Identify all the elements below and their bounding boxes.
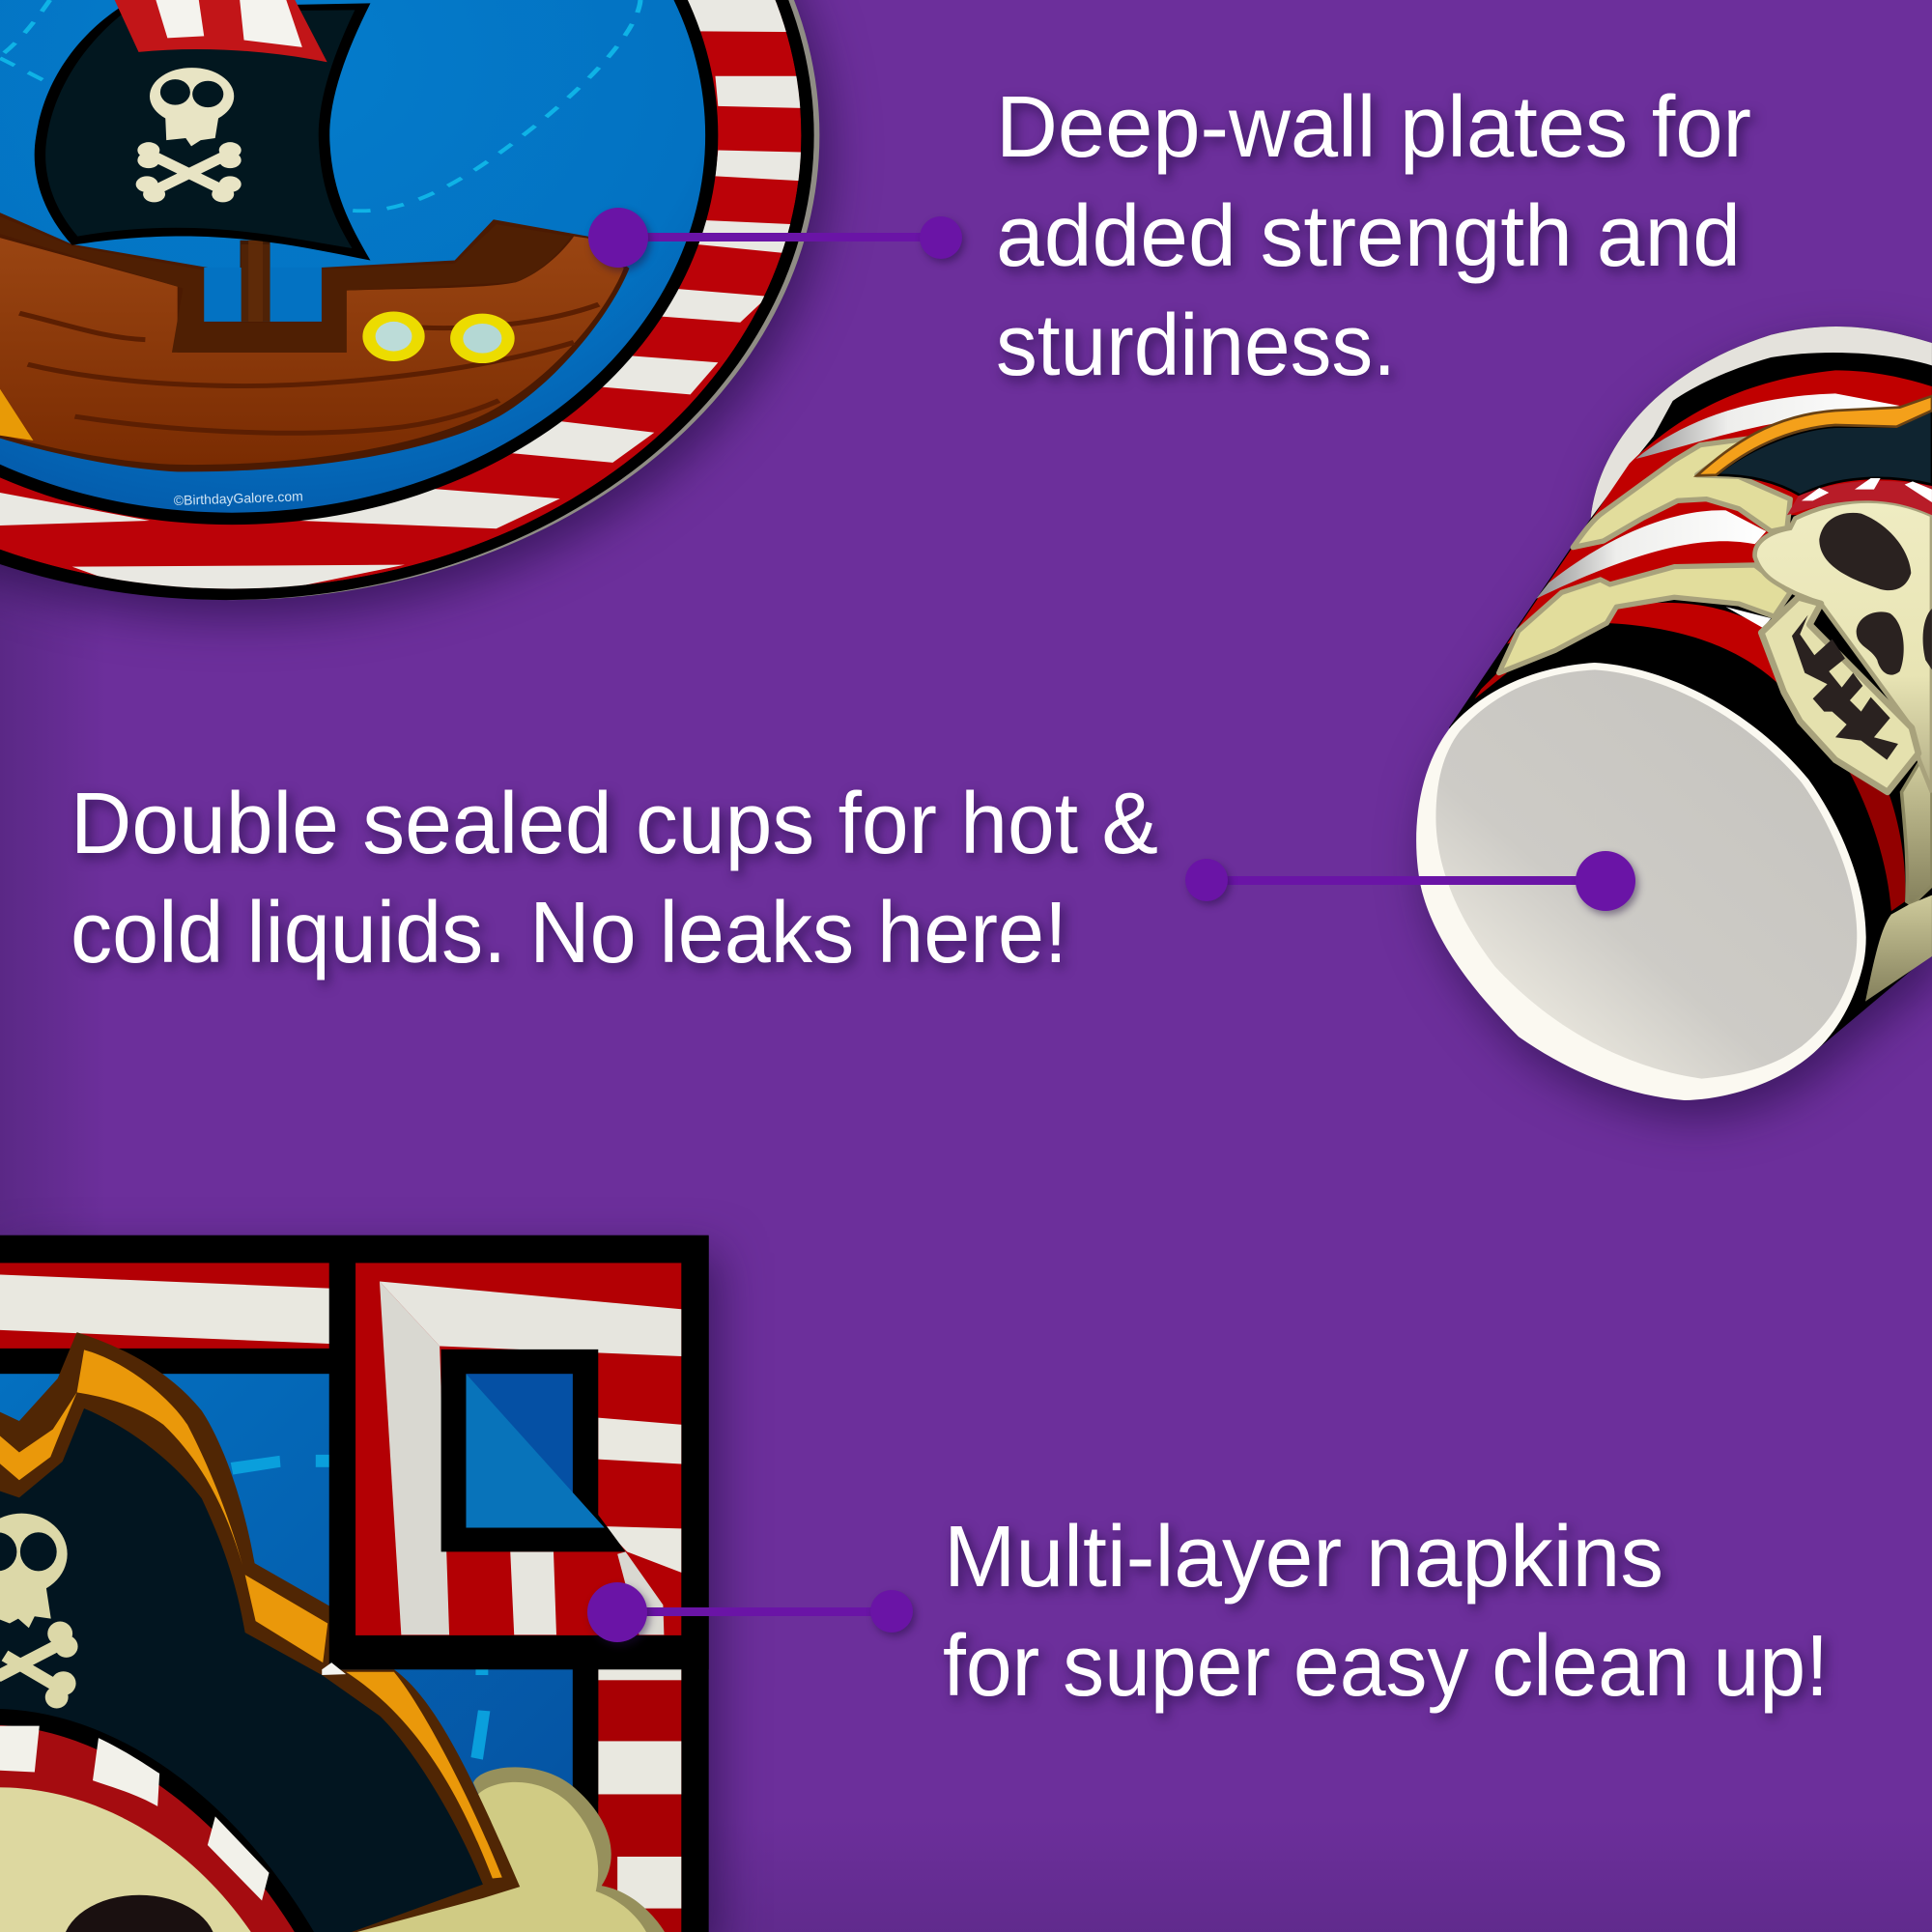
cup body <box>1449 327 1932 1053</box>
connector: cup <box>1185 851 1635 911</box>
portholes <box>362 312 515 363</box>
text: plates caption: added strength and <box>996 188 1741 285</box>
napkin right stripes <box>573 1662 681 1932</box>
folded corner <box>322 1236 709 1675</box>
cup stripes <box>1475 370 1932 698</box>
cup crossbones <box>1499 439 1790 673</box>
plate striped rim <box>0 0 804 591</box>
bandana and big skull <box>0 1709 317 1932</box>
panel: plate photo <box>0 0 819 600</box>
text: cups caption: cold liquids. No leaks here! <box>71 885 1067 981</box>
plate inner black ring <box>0 0 718 525</box>
text: cups caption <box>71 776 1158 981</box>
connector: plate <box>588 208 962 268</box>
cup lower right print <box>1848 763 1932 1002</box>
pirate sail <box>35 0 370 260</box>
napkin base <box>0 1236 709 1932</box>
connector: napkin <box>587 1582 913 1642</box>
text: napkins caption: Multi-layer napkins <box>944 1509 1663 1605</box>
cloud <box>288 1767 668 1932</box>
mast <box>241 241 270 323</box>
skull and crossbones <box>136 68 242 202</box>
pirate hat <box>0 1332 520 1932</box>
panel: paper cup photo <box>1416 327 1932 1100</box>
hat skull and bones <box>0 1514 78 1708</box>
dashed map route <box>0 0 640 211</box>
cup bottom <box>1416 663 1866 1100</box>
text: napkins caption: for super easy clean up! <box>943 1618 1829 1715</box>
text: napkins caption <box>943 1509 1829 1715</box>
panel: napkin photo <box>0 1236 709 1932</box>
text: cups caption: Double sealed cups for hot & <box>71 776 1158 872</box>
plate outer edge <box>0 0 819 600</box>
text: plates caption: Deep-wall plates for <box>996 79 1751 176</box>
text: plates caption <box>996 79 1751 394</box>
cup pirate hat <box>1697 396 1932 496</box>
text: plates caption: sturdiness. <box>996 298 1396 394</box>
napkin blue field <box>0 1374 573 1932</box>
cup skull <box>1755 478 1932 792</box>
copyright mark: ©BirthdayGalore.com <box>174 488 303 508</box>
napkin top stripes <box>0 1263 331 1349</box>
napkin dashed route <box>231 1455 490 1760</box>
cup top lip <box>1591 327 1932 519</box>
ship hull <box>0 211 629 471</box>
plate blue centre <box>0 0 705 513</box>
